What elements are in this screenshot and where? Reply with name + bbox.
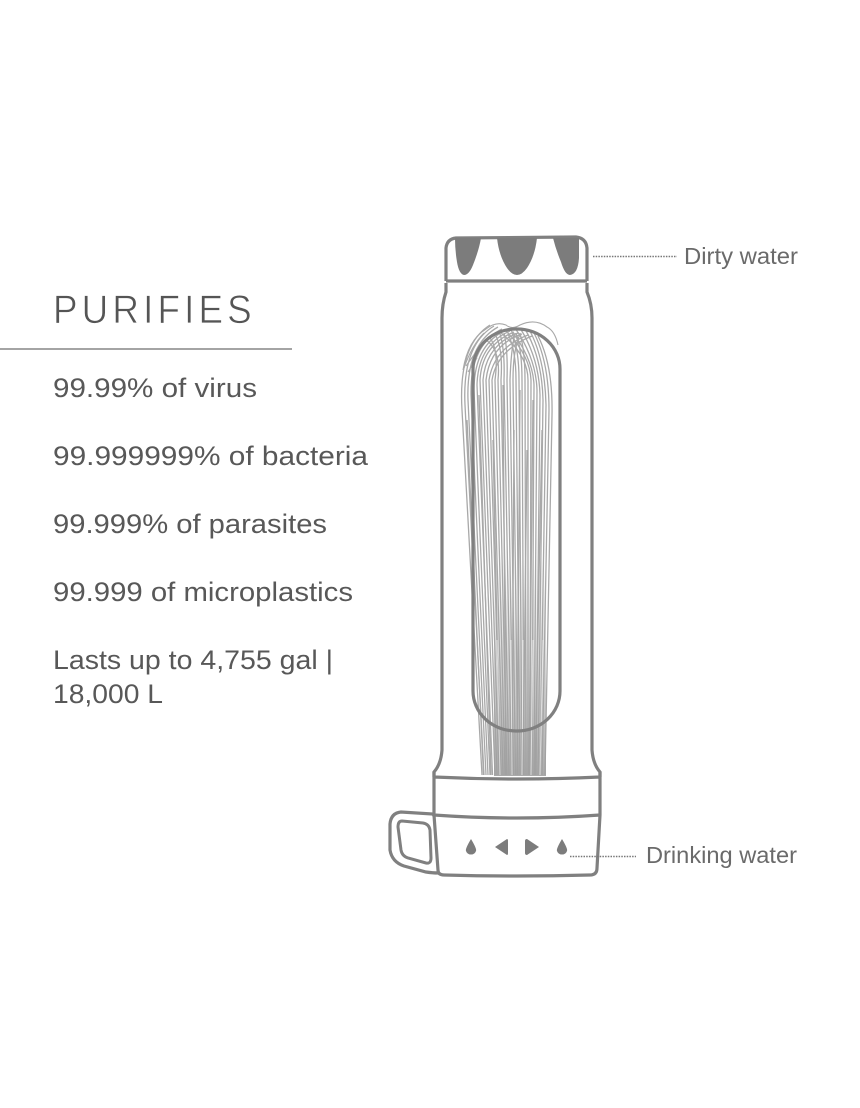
icon: left arrow	[495, 839, 508, 855]
icon: water drop right	[557, 839, 567, 855]
callout: dirty water: Dirty water	[684, 243, 798, 269]
bottle body	[434, 283, 446, 777]
text block: purification stats: 99.999% of parasites	[53, 509, 327, 539]
heading rule	[0, 348, 292, 350]
fiber density shading	[494, 560, 546, 776]
text block: purification stats: Lasts up to 4,755 gal |	[53, 645, 333, 675]
cap outline	[446, 237, 587, 281]
carry loop opening	[398, 821, 431, 863]
illustration: filter bottle	[390, 237, 600, 876]
text block: purification stats: 99.999999% of bacteria	[53, 441, 369, 471]
carry loop	[390, 812, 438, 873]
text block: purification stats	[53, 373, 369, 709]
filter window	[473, 329, 560, 731]
fiber highlights	[497, 640, 543, 775]
hollow fiber bundle	[462, 322, 558, 775]
icon: right arrow	[525, 839, 539, 855]
cap dark openings	[455, 238, 579, 275]
text block: purification stats: 99.99% of virus	[53, 373, 257, 403]
text block: purification stats: 99.999 of microplastics	[53, 577, 353, 607]
callout: drinking water: Drinking water	[646, 842, 797, 868]
icon: water drop left	[466, 839, 476, 855]
text block: purification stats: 18,000 L	[53, 679, 163, 709]
heading: purifies: PURIFIES	[53, 288, 252, 332]
base collar	[434, 772, 600, 876]
